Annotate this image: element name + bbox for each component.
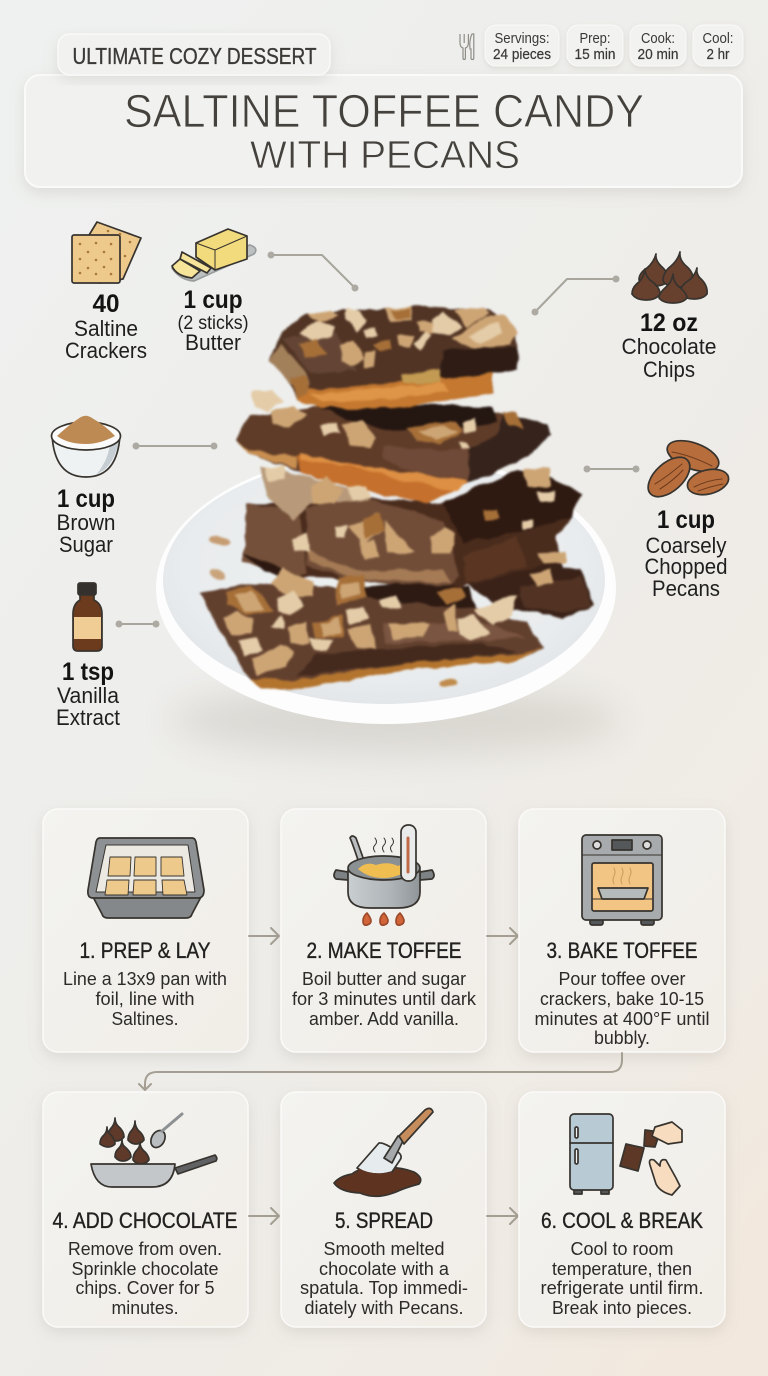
second piece (235, 405, 552, 503)
chip: cook: Cook: (641, 31, 675, 47)
step card 6 (519, 1092, 725, 1327)
step card 3: crackers, bake 10-15 (540, 988, 704, 1009)
ingredient: chocolate chips: 12 oz (640, 309, 698, 337)
panel: title (25, 75, 742, 187)
arrow 1 to 2 (249, 928, 279, 944)
icon: oven (582, 835, 662, 925)
hero: plate of toffee candy (156, 307, 620, 754)
icon: fork and knife (460, 34, 474, 60)
step card 2: for 3 minutes until dark (292, 988, 477, 1009)
step card 6: Cool to room (570, 1238, 674, 1259)
step card 4 (43, 1092, 248, 1327)
ingredient: pecans: Coarsely (646, 533, 727, 558)
icon: pan with crackers (88, 838, 204, 918)
ingredient: butter: Butter (185, 330, 241, 355)
step card 6: refrigerate until firm. (540, 1277, 704, 1298)
chip: servings: Servings: (494, 31, 550, 47)
step card 4: minutes. (112, 1297, 178, 1318)
ingredient: crackers (65, 222, 147, 363)
ingredient: butter: 1 cup (184, 286, 242, 314)
step card 1 (43, 809, 248, 1052)
icon: bowl of brown sugar (52, 416, 120, 477)
ingredient: vanilla: 1 tsp (62, 658, 114, 686)
step card 6: Break into pieces. (552, 1297, 692, 1318)
ingredient: butter: (2 sticks) (178, 313, 248, 334)
piece 4 (243, 470, 582, 592)
top piece (268, 307, 518, 408)
crumbs (210, 534, 232, 546)
chip: prep: Prep: (580, 31, 610, 47)
arrow 2 to 3 (487, 928, 518, 944)
ingredient: pecans (641, 435, 731, 601)
ingredient: pecans: 1 cup (657, 506, 715, 534)
ingredient: pecans: Chopped (644, 554, 728, 579)
step card 1: Saltines. (112, 1008, 178, 1029)
ingredient: chocolate chips: Chips (643, 357, 695, 382)
step card 1: Line a 13x9 pan with (63, 968, 227, 989)
ingredient: chocolate chips (622, 252, 716, 382)
arrow 4 to 5 (249, 1208, 279, 1224)
ingredient: vanilla: Extract (56, 705, 121, 730)
heading: subtitle: WITH PECANS (250, 134, 520, 177)
chip: cook: 20 min (638, 47, 678, 63)
ingredient: vanilla (56, 583, 121, 730)
chip: servings: 24 pieces (493, 47, 551, 63)
connector lines (116, 252, 640, 628)
icon: vanilla bottle (73, 583, 102, 651)
step card 3: minutes at 400°F until (534, 1008, 710, 1029)
step card 1: foil, line with (96, 988, 194, 1009)
ingredient: crackers: 40 (92, 290, 120, 318)
arrow 5 to 6 (487, 1208, 518, 1224)
chip: cool (693, 25, 743, 66)
step card 4: chips. Cover for 5 (76, 1277, 214, 1298)
ingredient: crackers: Saltine (74, 316, 138, 341)
icon: pecan halves (641, 435, 731, 504)
icon: chocolate chips (632, 252, 707, 303)
step card 2: amber. Add vanilla. (309, 1008, 459, 1029)
step card 3: Pour toffee over (558, 968, 686, 989)
step card 1: 1. PREP & LAY (80, 938, 211, 963)
ingredient: butter (172, 229, 256, 355)
chip: prep (567, 25, 623, 66)
step card 4: 4. ADD CHOCOLATE (52, 1208, 238, 1233)
step card 2: 2. MAKE TOFFEE (306, 938, 462, 963)
badge: ultimate cozy dessert: ULTIMATE COZY DESSERT (72, 43, 316, 69)
step card 6: 6. COOL & BREAK (541, 1208, 703, 1233)
step card 3 (519, 809, 725, 1052)
step card 2 (281, 809, 486, 1052)
heading: main title: SALTINE TOFFEE CANDY (124, 85, 644, 137)
step card 5: spatula. Top immedi- (300, 1277, 468, 1298)
step card 5 (281, 1092, 486, 1327)
icon: pot on flame (334, 825, 434, 925)
chip: cook (630, 25, 686, 66)
ingredient: chocolate chips: Chocolate (622, 334, 716, 359)
step card 5: diately with Pecans. (304, 1297, 464, 1318)
toffee stack (200, 307, 594, 690)
step card 4: Sprinkle chocolate (72, 1258, 218, 1279)
icon: saltine crackers (72, 222, 141, 283)
step card 3: bubbly. (594, 1027, 650, 1048)
icon: spatula and melted chocolate (334, 1108, 433, 1196)
ingredient: pecans: Pecans (652, 576, 720, 601)
chip: cool: Cool: (702, 31, 734, 47)
plate (156, 452, 616, 724)
step card 2: Boil butter and sugar (302, 968, 466, 989)
chip: prep: 15 min (574, 47, 616, 63)
pecan pieces (223, 307, 567, 675)
ingredient: crackers: Crackers (65, 338, 147, 363)
back right piece (467, 537, 594, 620)
arrow: row connector (139, 1053, 622, 1090)
icon: fridge and hands breaking toffee (570, 1114, 682, 1195)
step card 6: temperature, then (552, 1258, 692, 1279)
step card 5: 5. SPREAD (335, 1208, 433, 1233)
ingredient: vanilla: Vanilla (57, 683, 119, 708)
chip: servings (485, 25, 559, 66)
ingredient: brown sugar: 1 cup (57, 485, 115, 513)
step card 5: Smooth melted (324, 1238, 444, 1259)
icon: butter on dish (172, 229, 256, 281)
ingredient: brown sugar: Brown (56, 510, 116, 535)
chip: cool: 2 hr (706, 47, 730, 63)
icon: chips and skillet (91, 1114, 217, 1187)
badge: ultimate cozy dessert (58, 34, 330, 75)
ingredient: brown sugar (52, 416, 120, 557)
step card 5: chocolate with a (319, 1258, 450, 1279)
front piece (200, 583, 544, 690)
step card 3: 3. BAKE TOFFEE (546, 938, 698, 963)
ingredient: brown sugar: Sugar (59, 532, 113, 557)
step card 4: Remove from oven. (68, 1238, 222, 1259)
